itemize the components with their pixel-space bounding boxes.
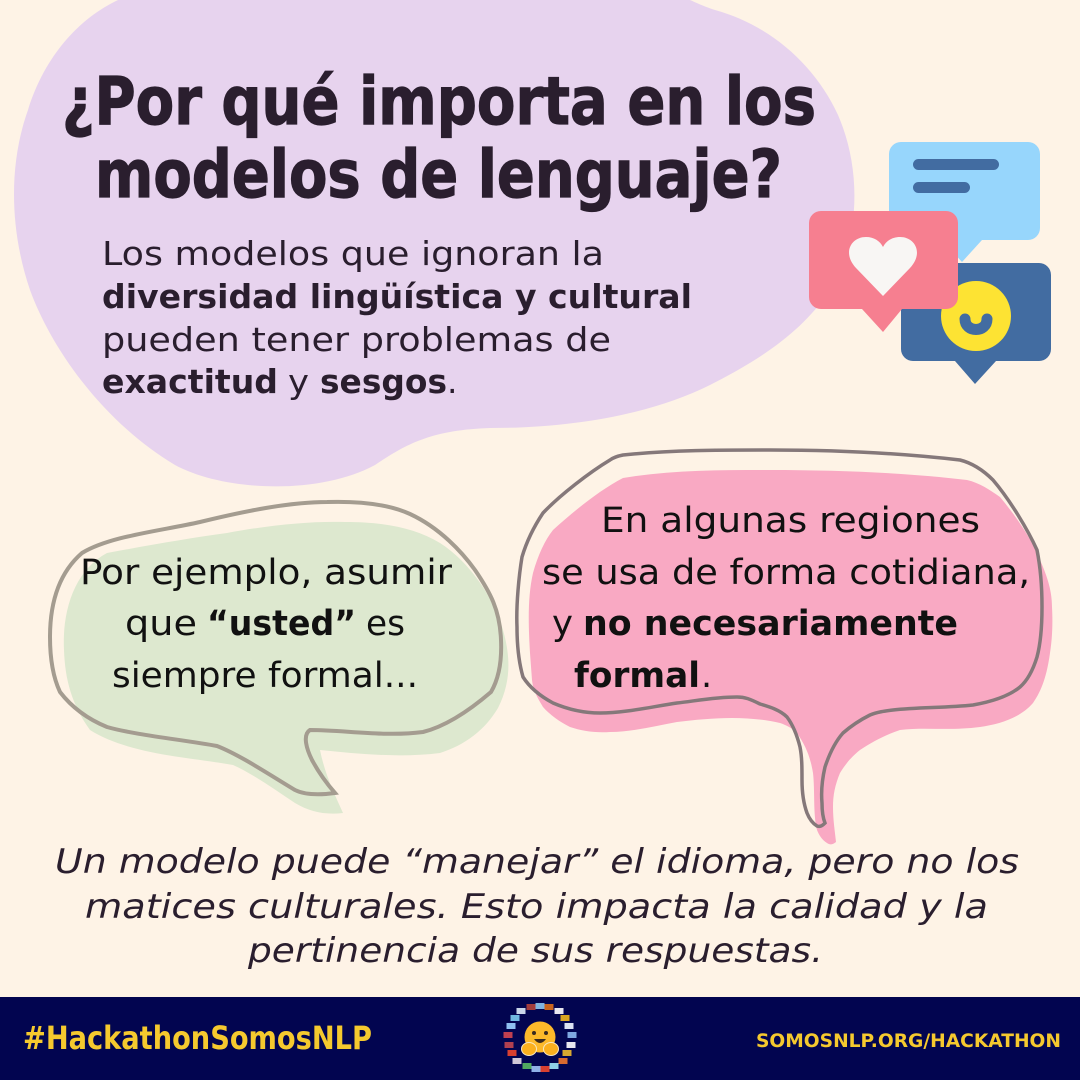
green bubble text: siempre formal... [112, 656, 418, 696]
flag ring [504, 1003, 576, 1072]
hugging face emoji [522, 1022, 558, 1056]
pink bubble outline [517, 450, 1042, 826]
green bubble text [80, 553, 453, 696]
green bubble text: es [366, 604, 405, 644]
pink bubble text: y [552, 604, 573, 644]
logo: flags ring and hugging face [504, 1003, 576, 1072]
pink bubble text [542, 501, 1030, 696]
icon: pink heart bubble [809, 211, 958, 332]
pink bubble text: formal [574, 656, 700, 696]
panel: pink speech bubble [517, 450, 1052, 844]
text block: intro: sesgos [320, 362, 447, 401]
icon: chat bubbles [809, 142, 1051, 384]
icon: blue message bubble [889, 142, 1040, 262]
text block: conclusion: Un modelo puede “manejar” el idioma, pero no los [55, 842, 1019, 882]
text block: intro: y [288, 362, 309, 401]
text block: conclusion [55, 842, 1019, 971]
hashtag: #HackathonSomosNLP [23, 1019, 372, 1057]
green bubble text: Por ejemplo, asumir [80, 553, 453, 593]
text block: intro [102, 234, 692, 401]
green bubble text: que [125, 604, 197, 644]
panel: green speech bubble [50, 502, 508, 814]
pink bubble text: se usa de forma cotidiana, [542, 553, 1030, 593]
text block: conclusion: pertinencia de sus respuestas. [247, 931, 823, 971]
title [62, 63, 816, 213]
pink bubble text: En algunas regiones [601, 501, 980, 541]
footer band [0, 997, 1080, 1080]
green bubble text: “usted” [207, 604, 356, 644]
green bubble fill [64, 522, 508, 814]
title: ¿Por qué importa en los [62, 63, 816, 140]
panel: purple blob [14, 0, 854, 486]
website url: SOMOSNLP.ORG/HACKATHON [756, 1030, 1061, 1052]
text block: intro: pueden tener problemas de [102, 320, 611, 359]
text block: intro: . [447, 362, 458, 401]
pink bubble text: no necesariamente [583, 604, 958, 644]
pink bubble text: . [701, 656, 712, 696]
text block: intro: diversidad lingüística y cultural [102, 277, 692, 316]
pink bubble fill [529, 470, 1052, 844]
title: modelos de lenguaje? [95, 136, 782, 213]
icon: navy smile bubble [901, 263, 1051, 384]
text block: intro: Los modelos que ignoran la [102, 234, 604, 273]
text block: intro: exactitud [102, 362, 278, 401]
green bubble outline [50, 502, 501, 794]
text block: conclusion: matices culturales. Esto impacta la calidad y la [85, 887, 988, 927]
